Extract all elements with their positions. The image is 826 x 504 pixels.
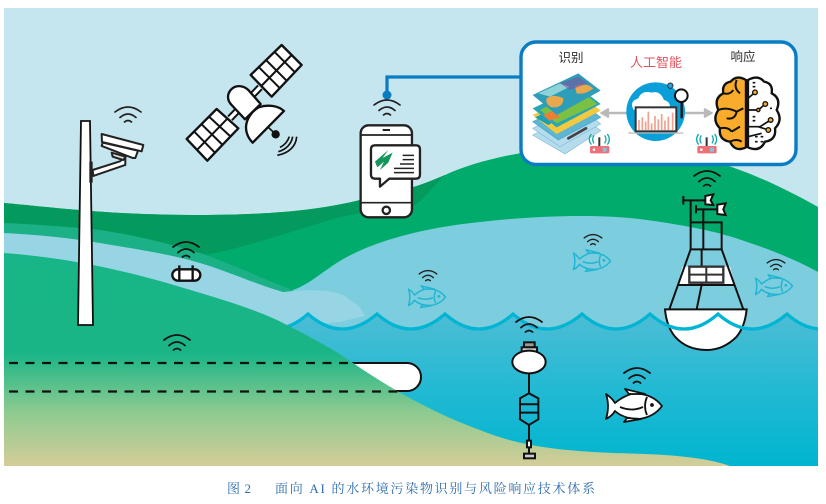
icon: router right: [697, 134, 717, 153]
label: recognition: 识别: [558, 51, 584, 65]
river bank strip: [4, 223, 293, 292]
icon: layered maps: [533, 73, 601, 154]
wifi: river capsule: [173, 242, 199, 257]
connector line to panel: [387, 77, 521, 95]
water below surface: [291, 316, 818, 466]
shore land and sand: [4, 253, 730, 466]
green hills: [4, 153, 818, 290]
wifi: black fish: [624, 368, 650, 383]
panel: AI recognition and response: [521, 42, 796, 164]
label: response: 响应: [730, 49, 756, 64]
arrow: left: [602, 109, 627, 117]
arrow: right: [685, 109, 711, 117]
wifi: camera: [115, 107, 141, 122]
small moored buoy: [512, 342, 546, 458]
smartphone: [361, 125, 420, 217]
black fish: [606, 389, 662, 422]
camera pole: [78, 121, 143, 325]
caption: 面向 AI 的水环境污染物识别与风险响应技术体系: [275, 481, 595, 496]
buried pipe dashed lines: [9, 363, 400, 392]
wifi: small buoy: [516, 317, 542, 332]
river capsule sensor: [172, 265, 200, 281]
icon: router left: [589, 134, 609, 153]
wifi: phone: [374, 100, 400, 115]
lake: [292, 216, 818, 328]
message bubble: [371, 145, 420, 187]
surveillance camera: [91, 134, 143, 183]
wifi: large buoy: [694, 171, 720, 186]
signal arcs: [277, 137, 297, 155]
upper solar panel: [251, 45, 302, 97]
connector dot: [382, 90, 392, 100]
underwater pipe outlet: [340, 363, 421, 391]
lower solar panel: [187, 109, 238, 161]
caption: 图 2: [227, 481, 251, 496]
icon: AI laptop in circle: [626, 82, 688, 141]
antenna: [268, 127, 276, 134]
icon: brain: [715, 78, 780, 149]
darker hill on the left: [4, 175, 445, 260]
blue fish center: [574, 250, 610, 272]
dish: [246, 106, 284, 143]
wifi: blue fish center: [584, 235, 602, 245]
wifi: blue fish left: [419, 271, 437, 281]
blue fish left: [409, 286, 445, 308]
river: [4, 233, 365, 326]
satellite: [187, 45, 302, 161]
large monitoring buoy: [665, 194, 747, 350]
pole: [78, 121, 93, 325]
satellite body: [228, 86, 261, 119]
blue fish right: [756, 275, 792, 297]
wifi: blue fish right: [767, 260, 785, 270]
sky background: [4, 8, 818, 215]
label: artificial intelligence: 人工智能: [630, 55, 682, 70]
connecting boom: [230, 87, 260, 118]
wifi: pipe outlet: [164, 335, 190, 350]
wave line: [240, 314, 826, 329]
